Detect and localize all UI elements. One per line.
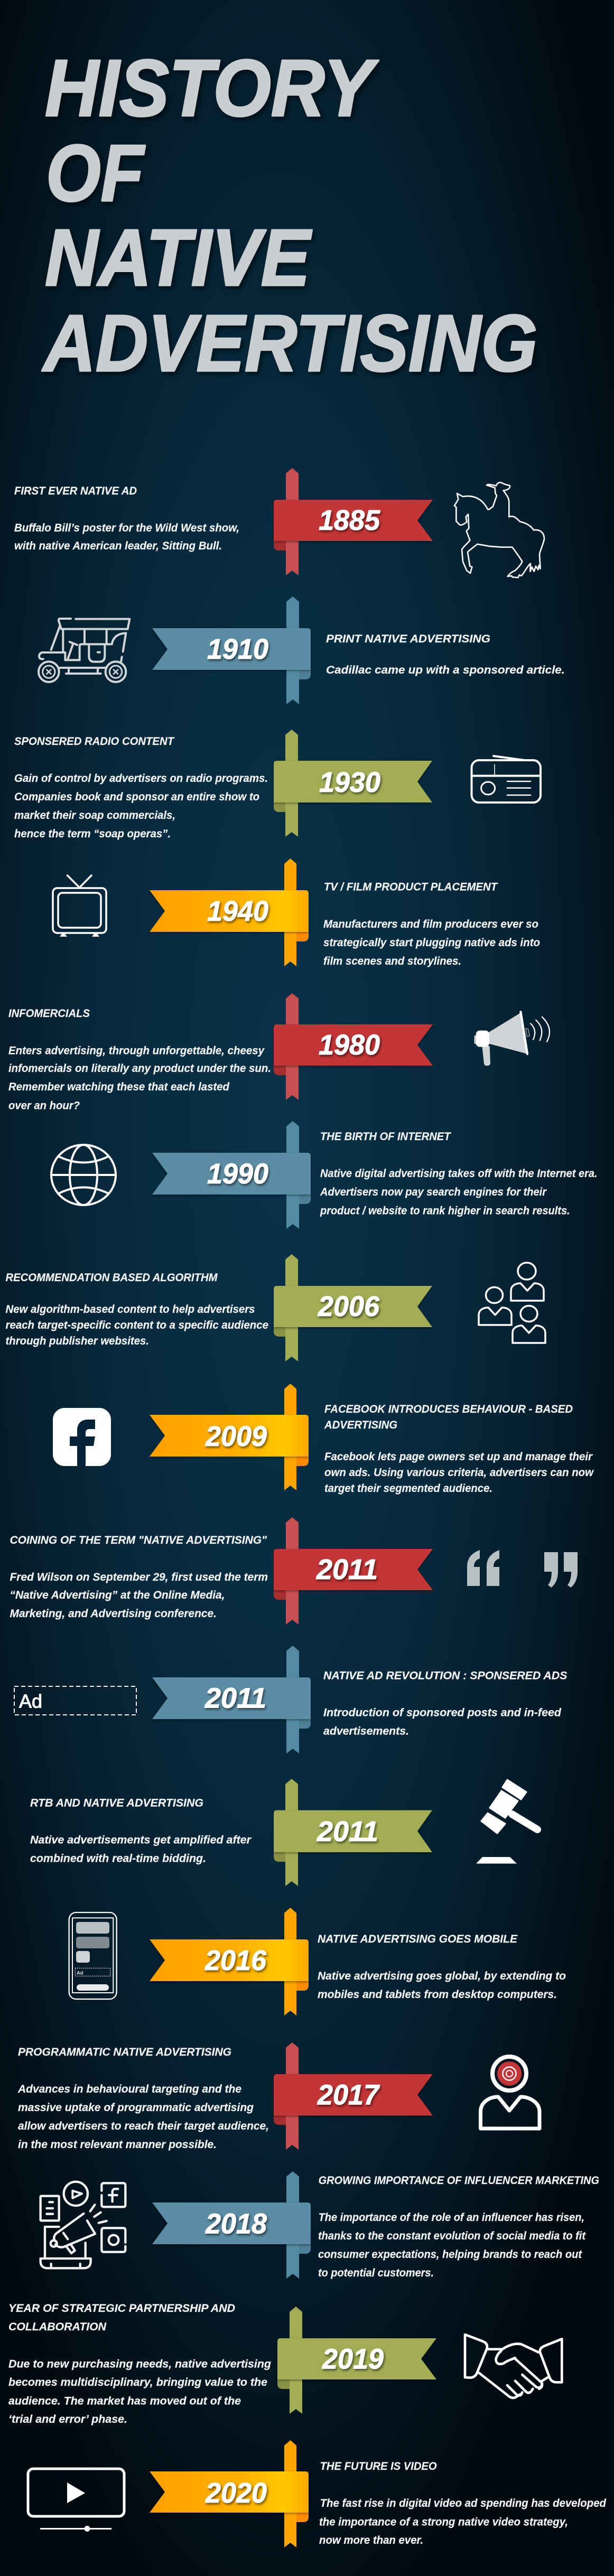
- icon: targeted person: [481, 2057, 539, 2129]
- ribbon: 2020 yellow: [150, 2440, 309, 2547]
- text: radio description: market their soap commercials,: [14, 809, 175, 822]
- text: algorithm description: reach target-specific content to a specific audience: [5, 1319, 268, 1331]
- text: influencer description: consumer expectations, helping brands to reach out: [318, 2248, 582, 2261]
- ribbon: 2009 yellow: [150, 1384, 309, 1490]
- heading: year of strategic partnership: COLLABORATION: [8, 2321, 107, 2333]
- ribbon: 2011 red: [274, 1517, 433, 1625]
- text: tv film description: Manufacturers and film producers ever so: [323, 918, 538, 930]
- ribbon: 1910 blue: [152, 596, 311, 704]
- heading: the future is video: THE FUTURE IS VIDEO: [320, 2460, 437, 2472]
- text: rtb description: Native advertisements get amplified after: [30, 1834, 252, 1846]
- ribbon: 2006 green: [274, 1254, 432, 1361]
- text: tv film description: film scenes and storylines.: [323, 955, 461, 967]
- text: radio description: [14, 772, 268, 840]
- icon: people: [479, 1263, 545, 1343]
- ribbon: 1930 green: [274, 730, 432, 837]
- panel: 2019 strategic partnership: [8, 2302, 562, 2425]
- text: programmatic description: [17, 2083, 269, 2151]
- ribbon: 2011 green: [274, 1779, 432, 1886]
- icon: handshake: [465, 2335, 562, 2398]
- panel: 1990 birth of internet: [51, 1121, 597, 1229]
- heading: coining of the term: COINING OF THE TERM "NATIVE ADVERTISING": [10, 1534, 267, 1546]
- panel: 2011 coining of the term: [10, 1517, 578, 1625]
- ribbon: 1980 red: [274, 993, 433, 1100]
- title: [41, 43, 537, 388]
- icon: social media marketing: [41, 2182, 125, 2268]
- icon: horse and rider: [454, 482, 544, 577]
- icon: vintage car: [39, 619, 129, 682]
- text: internet description: Native digital advertising takes off with the Internet era.: [320, 1168, 597, 1180]
- ribbon: 2011 green: 2011: [317, 1816, 378, 1847]
- panel: 2011 rtb and native advertising: [30, 1779, 537, 1886]
- icon: smartphone with ad: Ad: [77, 1970, 83, 1975]
- heading: the birth of internet: THE BIRTH OF INTERNET: [320, 1131, 452, 1143]
- text: partnership description: [8, 2358, 271, 2425]
- text: video description: [319, 2497, 607, 2546]
- heading: print native advertising: PRINT NATIVE ADVERTISING: [326, 633, 490, 645]
- heading: native ad revolution: NATIVE AD REVOLUTION : SPONSERED ADS: [323, 1669, 567, 1682]
- ribbon: 2019 green: 2019: [322, 2344, 384, 2375]
- text: programmatic description: in the most relevant manner possible.: [18, 2139, 217, 2151]
- text: facebook description: [324, 1451, 594, 1495]
- panel: 2020 the future is video: [28, 2440, 607, 2547]
- ribbon: 2011 blue: 2011: [204, 1682, 266, 1714]
- text: video description: now more than ever.: [319, 2534, 423, 2546]
- heading: programmatic native advertising: PROGRAMMATIC NATIVE ADVERTISING: [18, 2046, 231, 2058]
- text: coining description: Fred Wilson on September 29, first used the term: [10, 1571, 268, 1583]
- text: facebook description: own ads. Using various criteria, advertisers can now: [324, 1467, 594, 1479]
- ribbon: 2018 blue: 2018: [205, 2208, 267, 2240]
- ribbon: 2018 blue: [152, 2171, 311, 2279]
- ribbon: 2011 blue: [152, 1646, 311, 1753]
- icon: video player: [28, 2469, 124, 2532]
- title: NATIVE: [45, 213, 312, 303]
- ribbon: 2011 red: 2011: [316, 1554, 378, 1585]
- panel: 2011 native ad revolution: [14, 1646, 567, 1753]
- panel: 2017 programmatic native advertising: [17, 2042, 539, 2151]
- ribbon: 1885 red: 1885: [319, 505, 380, 536]
- panel: 2016 native advertising goes mobile: [69, 1908, 566, 2015]
- heading: year of strategic partnership: [8, 2302, 235, 2333]
- text: tv film description: strategically start plugging native ads into: [323, 937, 540, 949]
- text: infomercials description: infomercials on literally any product under the sun.: [8, 1062, 271, 1075]
- text: partnership description: Due to new purchasing needs, native advertising: [8, 2358, 271, 2370]
- text: revolution description: Introduction of sponsored posts and in-feed: [323, 1706, 562, 1719]
- text: internet description: Advertisers now pay search engines for their: [320, 1186, 547, 1198]
- text: programmatic description: allow advertisers to reach their target audience,: [18, 2120, 269, 2132]
- text: partnership description: audience. The market has moved out of the: [8, 2395, 241, 2407]
- text: influencer description: to potential customers.: [318, 2267, 434, 2279]
- text: infomercials description: [8, 1045, 271, 1112]
- text: first ever native ad description: [14, 522, 239, 552]
- heading: tv film product placement: TV / FILM PRODUCT PLACEMENT: [324, 881, 498, 893]
- ribbon: 1885 red: [274, 468, 433, 575]
- text: radio description: Gain of control by advertisers on radio programs.: [14, 772, 268, 785]
- text: infomercials description: Remember watching these that each lasted: [8, 1081, 230, 1093]
- title: HISTORY: [45, 43, 379, 133]
- text: first ever native ad description: Buffalo Bill’s poster for the Wild West show,: [14, 522, 239, 534]
- text: rtb description: [30, 1834, 252, 1865]
- text: infomercials description: Enters advertising, through unforgettable, cheesy: [8, 1045, 265, 1057]
- heading: growing importance of influencer marketing: GROWING IMPORTANCE OF INFLUENCER MARKETING: [319, 2174, 599, 2187]
- ribbon: 1990 blue: [152, 1121, 311, 1229]
- icon: smartphone with ad: [69, 1912, 117, 1999]
- heading: goes mobile: NATIVE ADVERTISING GOES MOBILE: [318, 1933, 518, 1945]
- heading: facebook introduces behaviour: [324, 1403, 573, 1431]
- panel: 1930 sponsored radio content: [14, 730, 541, 840]
- icon: radio: [471, 756, 541, 802]
- ribbon: 1940 yellow: 1940: [207, 895, 268, 927]
- text: infomercials description: over an hour?: [8, 1100, 80, 1112]
- title: OF: [46, 128, 146, 218]
- text: revolution description: advertisements.: [323, 1725, 409, 1738]
- ribbon: 1910 blue: 1910: [207, 633, 268, 665]
- text: coining description: “Native Advertising” at the Online Media,: [10, 1589, 225, 1601]
- ribbon: 2016 yellow: [150, 1908, 309, 2015]
- text: algorithm description: New algorithm-based content to help advertisers: [5, 1303, 255, 1315]
- text: partnership description: ‘trial and error’ phase.: [8, 2413, 127, 2425]
- heading: year of strategic partnership: YEAR OF STRATEGIC PARTNERSHIP AND: [8, 2302, 235, 2314]
- text: influencer description: thanks to the constant evolution of social media to fit: [318, 2230, 586, 2242]
- heading: first ever native ad: FIRST EVER NATIVE AD: [14, 485, 137, 497]
- panel: 1980 infomercials: [8, 993, 550, 1112]
- text: mobile description: [318, 1970, 566, 2001]
- text: print native description: Cadillac came up with a sponsored article.: [326, 664, 565, 676]
- ribbon: 2009 yellow: 2009: [205, 1421, 267, 1452]
- text: algorithm description: [5, 1303, 268, 1347]
- text: facebook description: Facebook lets page owners set up and manage their: [324, 1451, 593, 1463]
- panel: 1910 print native advertising: [39, 596, 565, 704]
- text: radio description: Companies book and sponsor an entire show to: [14, 791, 259, 803]
- text: revolution description: [323, 1706, 562, 1738]
- icon: quotation marks: [467, 1550, 578, 1588]
- icon: megaphone: [474, 1012, 550, 1066]
- icon: gavel: [476, 1780, 537, 1864]
- heading: rtb and native advertising: RTB AND NATIVE ADVERTISING: [30, 1797, 203, 1809]
- text: partnership description: becomes multidisciplinary, bringing value to the: [8, 2376, 267, 2388]
- ribbon: 1980 red: 1980: [319, 1029, 380, 1061]
- text: coining description: Marketing, and Advertising conference.: [10, 1608, 217, 1620]
- text: first ever native ad description: with native American leader, Sitting Bull.: [14, 540, 222, 552]
- heading: infomercials: INFOMERCIALS: [8, 1007, 90, 1020]
- text: rtb description: combined with real-time bidding.: [30, 1853, 206, 1865]
- text: programmatic description: massive uptake of programmatic advertising: [18, 2102, 254, 2114]
- panel: 2006 recommendation based algorithm: [5, 1254, 545, 1361]
- text: influencer description: [318, 2211, 586, 2279]
- text: coining description: [10, 1571, 268, 1620]
- ribbon: 2017 red: 2017: [317, 2079, 380, 2111]
- ribbon: 2017 red: [274, 2042, 433, 2150]
- ribbon: 2020 yellow: 2020: [205, 2477, 267, 2509]
- heading: recommendation based algorithm: RECOMMENDATION BASED ALGORITHM: [5, 1272, 218, 1284]
- text: video description: the importance of a strong native video strategy,: [319, 2516, 568, 2528]
- icon: television: [53, 875, 106, 937]
- text: internet description: [320, 1168, 597, 1217]
- ribbon: 1990 blue: 1990: [207, 1158, 268, 1190]
- heading: facebook introduces behaviour: FACEBOOK INTRODUCES BEHAVIOUR - BASED: [324, 1403, 573, 1415]
- ribbon: 1930 green: 1930: [319, 767, 380, 798]
- panel: 2009 facebook behaviour based advertising: [53, 1384, 594, 1495]
- text: facebook description: target their segmented audience.: [324, 1482, 492, 1495]
- text: video description: The fast rise in digital video ad spending has developed: [320, 2497, 607, 2509]
- ribbon: 2019 green: [277, 2307, 436, 2414]
- icon: ad box: [14, 1686, 136, 1715]
- ribbon: 2006 green: 2006: [318, 1291, 380, 1322]
- panel: 2018 influencer marketing: [41, 2171, 599, 2279]
- icon: ad box: Ad: [19, 1691, 42, 1712]
- icon: facebook logo: [53, 1408, 111, 1466]
- text: influencer description: The importance of the role of an influencer has risen,: [319, 2211, 584, 2224]
- text: algorithm description: through publisher websites.: [5, 1335, 149, 1347]
- title: ADVERTISING: [41, 298, 537, 388]
- text: radio description: hence the term “soap operas”.: [14, 828, 171, 840]
- text: tv film description: [323, 918, 540, 967]
- heading: facebook introduces behaviour: ADVERTISING: [324, 1419, 397, 1431]
- text: mobile description: Native advertising goes global, by extending to: [318, 1970, 566, 1982]
- panel: 1940 tv film product placement: [53, 858, 540, 967]
- ribbon: 1940 yellow: [150, 858, 309, 966]
- text: programmatic description: Advances in behavioural targeting and the: [17, 2083, 241, 2095]
- text: internet description: product / website to rank higher in search results.: [320, 1205, 570, 1217]
- icon: globe: [51, 1145, 116, 1205]
- heading: sponsered radio content: SPONSERED RADIO CONTENT: [14, 735, 175, 748]
- ribbon: 2016 yellow: 2016: [204, 1945, 267, 1976]
- text: mobile description: mobiles and tablets from desktop computers.: [318, 1989, 557, 2001]
- panel: 1885 first ever native ad: [14, 468, 544, 577]
